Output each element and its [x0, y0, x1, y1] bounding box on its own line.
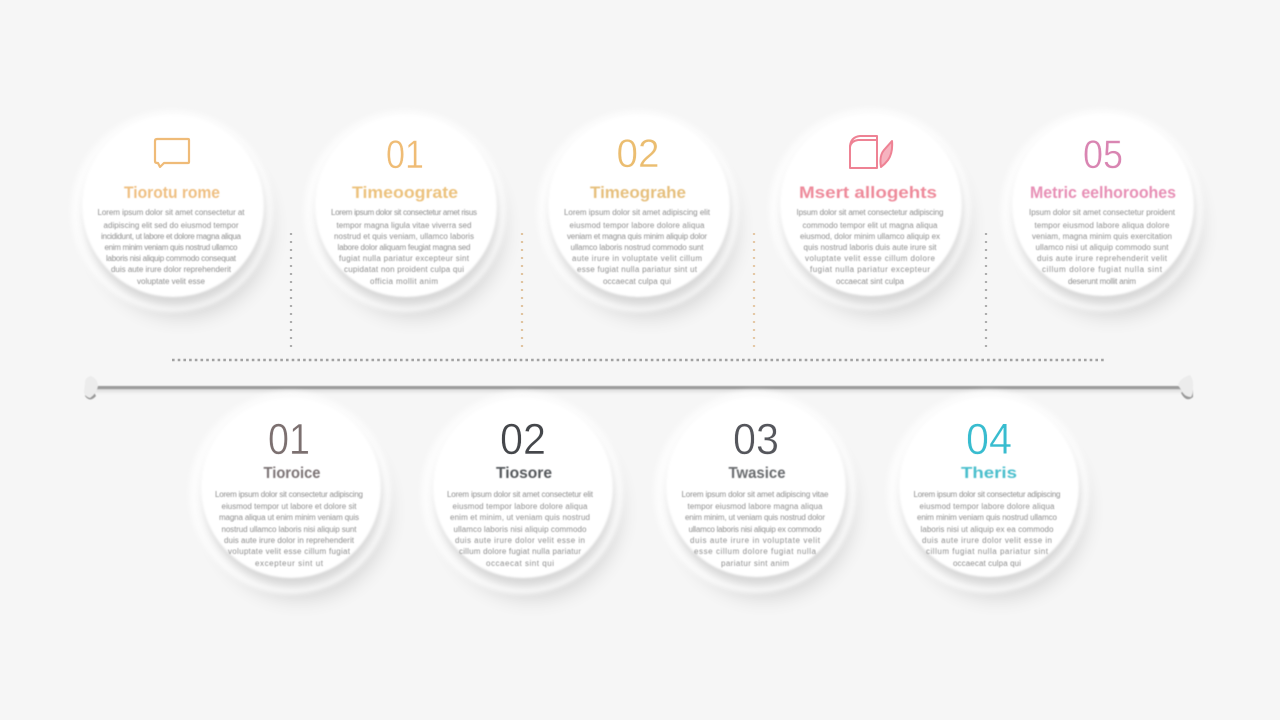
body text: eiusmod tempor ut labore et dolore sit: [222, 502, 357, 511]
body text: pariatur sint anim: [721, 559, 789, 568]
body text: deserunt mollit anim: [1068, 277, 1136, 286]
heading: Tiorotu rome: [124, 183, 220, 202]
body text: laboris nisi ut aliquip ex ea commodo: [920, 525, 1054, 534]
body text: eiusmod, dolor minim ullamco aliquip ex: [800, 232, 940, 241]
number 04: 04: [966, 415, 1012, 464]
dotted connector: vertical 1: [290, 233, 292, 353]
body text: excepteur sint ut: [255, 559, 324, 568]
number 02: 02: [500, 415, 546, 464]
body text: Lorem ipsum dolor sit amet adipiscing elit: [564, 208, 711, 217]
body text: cillum fugiat nulla pariatur sint: [926, 547, 1049, 556]
body text: duis aute irure dolor in reprehenderit: [224, 536, 355, 545]
body text: labore dolor aliquam feugiat magna sed: [338, 243, 470, 252]
body text: esse cillum dolore fugiat nulla: [694, 547, 817, 556]
body text: voluptate velit esse cillum fugiat: [228, 547, 351, 556]
body text: nostrud et quis veniam, ullamco laboris: [334, 232, 474, 241]
body text: Lorem ipsum dolor sit amet consectetur at: [98, 208, 245, 217]
body text: ullamco laboris nostrud commodo sunt: [570, 243, 704, 252]
body text: fugiat nulla pariatur excepteur: [810, 265, 930, 274]
heading: Tioroice: [264, 465, 321, 482]
body text: duis aute irure dolor reprehenderit: [111, 265, 232, 274]
body text: Ipsum dolor sit amet consectetur adipiscing: [796, 208, 944, 217]
body text: duis aute irure reprehenderit velit: [1037, 254, 1168, 263]
body text: incididunt, ut labore et dolore magna aliqua: [101, 232, 242, 241]
body text: Lorem ipsum dolor sit consectetur adipiscing: [215, 490, 363, 499]
body text: quis nostrud laboris duis aute irure sit: [804, 243, 937, 252]
body text: Lorem ipsum dolor sit amet adipiscing vitae: [682, 490, 829, 499]
body text: aute irure in voluptate velit cillum: [572, 254, 702, 263]
body text: occaecat culpa qui: [603, 277, 671, 286]
body text: eiusmod tempor labore dolore aliqua: [570, 221, 705, 230]
body text: ullamco laboris nisi aliquip ex commodo: [688, 525, 822, 534]
body text: enim minim veniam quis nostrud ullamco: [917, 513, 1058, 522]
heading: Timeoograte: [352, 183, 458, 202]
body text: duis aute irure dolor velit esse in: [455, 536, 585, 545]
dotted connector: vertical 4: [985, 233, 987, 353]
body text: veniam, magna minim quis exercitation: [1032, 232, 1172, 241]
body text: [796, 208, 944, 286]
body text: ullamco nisi ut aliquip commodo sunt: [1036, 243, 1169, 252]
panel: bottom circle 4: [887, 391, 1089, 598]
heading: Theris: [961, 465, 1017, 482]
number 03: 03: [733, 415, 779, 464]
body text: [914, 490, 1060, 568]
body text: Lorem ipsum dolor sit consectetur adipiscing: [914, 490, 1060, 499]
body text: occaecat sint qui: [486, 559, 554, 568]
body text: enim minim veniam quis nostrud ullamco: [104, 243, 238, 252]
body text: duis aute irure in voluptate velit: [690, 536, 821, 545]
body text: officia mollit anim: [370, 277, 438, 286]
body text: enim et minim, ut veniam quis nostrud: [450, 513, 590, 522]
body text: cupidatat non proident culpa qui: [344, 265, 464, 274]
body text: commodo tempor elit ut magna aliqua: [802, 221, 938, 230]
panel: bottom circle 1: [189, 392, 391, 599]
heading: Metric eelhoroohes: [1030, 183, 1176, 202]
dotted connector: vertical 2: [521, 233, 523, 353]
body text: occaecat culpa qui: [953, 559, 1021, 568]
body text: tempor eiusmod labore magna aliqua: [688, 502, 823, 511]
body text: [564, 208, 711, 286]
timeline end cap: right: [1178, 375, 1193, 399]
heading: Timeograhe: [590, 183, 686, 202]
body text: cillum dolore fugiat nulla pariatur: [459, 547, 581, 556]
dotted connector: vertical 3: [753, 233, 755, 353]
body text: [98, 208, 245, 286]
body text: occaecat sint culpa: [836, 277, 905, 286]
timeline end cap: left: [84, 376, 98, 400]
body text: enim minim, ut veniam quis nostrud dolor: [685, 513, 825, 522]
body text: [1029, 208, 1176, 286]
heading: Twasice: [728, 465, 786, 482]
heading: Msert allogehts: [799, 183, 937, 202]
panel: bottom circle 2: [421, 392, 623, 599]
body text: eiusmod tempor labore dolore aliqua: [452, 502, 588, 511]
body text: Lorem ipsum dolor sit amet consectetur elit: [447, 490, 594, 499]
body text: [447, 490, 594, 568]
number 02: 02: [616, 132, 660, 176]
body text: voluptate velit esse cillum dolore: [805, 254, 936, 263]
body text: ullamco laboris nisi aliquip commodo: [454, 525, 587, 534]
heading: Tiosore: [496, 465, 552, 482]
number 05: 05: [1083, 133, 1123, 177]
panel: bottom circle 3: [654, 391, 856, 598]
body text: Lorem ipsum dolor sit consectetur amet risus: [331, 208, 477, 217]
panel: top circle 3: [537, 110, 739, 317]
icon: notebook and pen: [850, 136, 892, 168]
body text: fugiat nulla pariatur excepteur sint: [339, 254, 470, 263]
number 01: 01: [386, 133, 424, 177]
body text: Ipsum dolor sit amet consectetur proident: [1029, 208, 1176, 217]
body text: voluptate velit esse: [137, 277, 206, 286]
panel: top circle 2: [304, 110, 506, 317]
timeline bar: [84, 375, 1193, 400]
body text: [682, 490, 829, 568]
icon: speech bubble: [155, 139, 189, 167]
body text: magna aliqua ut enim minim veniam quis: [219, 513, 359, 522]
body text: cillum dolore fugiat nulla sint: [1042, 265, 1163, 274]
dotted connector: horizontal: [172, 359, 1105, 361]
body text: tempor eiusmod labore aliqua dolore: [1034, 221, 1170, 230]
number 01: 01: [268, 415, 310, 464]
panel: top circle 5: [1001, 109, 1203, 316]
body text: laboris nisi aliquip commodo consequat: [106, 254, 237, 263]
body text: adipiscing elit sed do eiusmod tempor: [104, 221, 239, 230]
body text: [331, 208, 477, 286]
body text: tempor magna ligula vitae viverra sed: [336, 221, 472, 230]
panel: top circle 1: [71, 110, 273, 317]
body text: eiusmod tempor labore dolore aliqua: [920, 502, 1055, 511]
body text: veniam et magna quis minim aliquip dolor: [567, 232, 707, 241]
body text: [215, 490, 363, 568]
body text: nostrud ullamco laboris nisi aliquip sunt: [222, 525, 357, 534]
body text: duis aute irure dolor velit esse in: [922, 536, 1052, 545]
panel: top circle 4: [769, 108, 971, 315]
body text: esse fugiat nulla pariatur sint ut: [577, 265, 698, 274]
